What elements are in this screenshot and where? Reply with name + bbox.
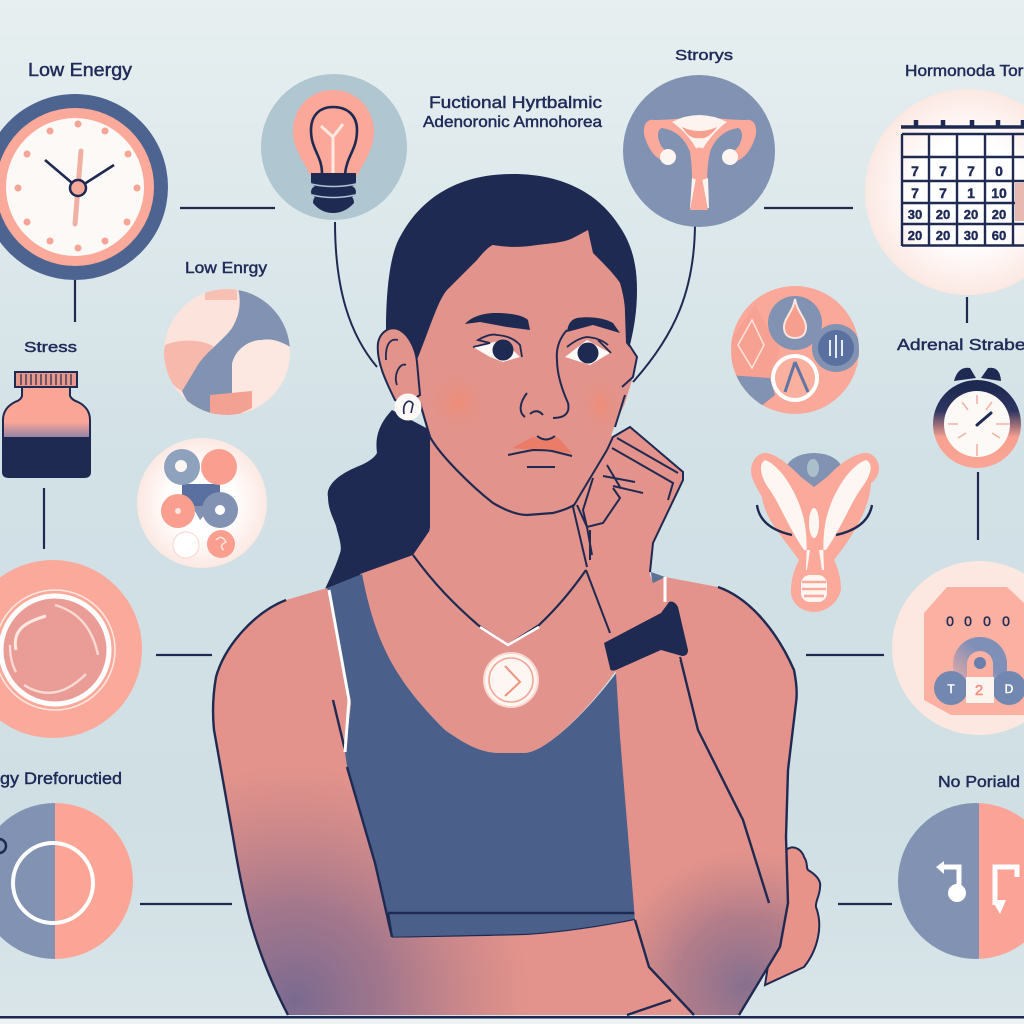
- icon: padlock calendar circle: 0: [946, 613, 954, 629]
- face: [397, 230, 637, 515]
- white strap piping: [329, 577, 665, 752]
- icon: padlock calendar circle: 2: [975, 682, 983, 699]
- subtitle: Adenoronic Amnohorea: [423, 114, 602, 131]
- ponytail: [325, 410, 430, 589]
- neck and chest skin: [360, 430, 650, 753]
- bottom strip: [0, 1019, 1024, 1024]
- label: energy deficiency: gy Drefoructied: [0, 769, 122, 788]
- icon: calendar: 7: [939, 185, 947, 201]
- eyes: [473, 335, 611, 365]
- icon: alarm clock: [933, 368, 1021, 468]
- icon: wall clock: [0, 94, 168, 280]
- icon: calendar: 20: [936, 207, 950, 222]
- right arm: [610, 577, 797, 1015]
- wrist skin: [587, 540, 680, 673]
- icon: split circle with arrows: [898, 803, 1024, 959]
- label: low energy top left: Low Energy: [28, 60, 132, 80]
- label: stress left: Stress: [24, 339, 77, 356]
- icon: padlock calendar circle: 0: [1002, 613, 1010, 629]
- tank top: [327, 574, 635, 938]
- hair: [386, 174, 637, 372]
- connector lines: [44, 208, 978, 904]
- nose: [521, 330, 568, 418]
- icon: reproductive organ: [751, 453, 879, 612]
- icon: calendar: 7: [911, 163, 919, 179]
- icon: padlock calendar circle: D: [1005, 682, 1014, 696]
- fist: [573, 427, 683, 572]
- label: adrenal: Adrenal Straber: [897, 337, 1024, 354]
- title: Fuctional Hyrtbalmic: [429, 93, 603, 112]
- left arm: [213, 588, 700, 1015]
- icon: padlock calendar circle: T: [947, 682, 955, 696]
- icon: calendar: 7: [911, 185, 919, 201]
- icon: calendar: 60: [992, 228, 1006, 243]
- right ear: [615, 343, 637, 427]
- cheeks: [428, 372, 488, 432]
- icon: padlock calendar circle: 0: [964, 613, 972, 629]
- icon: light bulb: [261, 74, 407, 220]
- icon: calendar: [865, 89, 1024, 295]
- icon: hormone molecules circle: [137, 438, 267, 568]
- tank top band: [388, 913, 635, 938]
- figure outlines: [213, 587, 797, 1015]
- left arm shading: [213, 588, 700, 1015]
- label: hormonal top right: Hormonoda Torn: [905, 63, 1024, 80]
- icon: padlock calendar circle: [892, 561, 1024, 735]
- hand behind elbow: [765, 847, 820, 985]
- jaw line: [420, 403, 580, 515]
- base line: [0, 1016, 1024, 1018]
- icon: uterus: [623, 75, 775, 227]
- right arm shading: [610, 577, 797, 1015]
- icon: split circle with ring: [0, 803, 133, 959]
- label: low energy middle: Low Enrgy: [185, 260, 267, 277]
- icon: calendar: 1: [967, 185, 975, 201]
- icon: padlock calendar circle: 0: [983, 613, 991, 629]
- icon: calendar: 0: [995, 163, 1003, 179]
- fist outline: [573, 427, 683, 572]
- label: stress top: Strorys: [675, 47, 733, 64]
- icon: calendar: 20: [992, 207, 1006, 222]
- earring: [394, 394, 422, 420]
- icon: calendar: 20: [964, 207, 978, 222]
- icon: calendar: 30: [908, 207, 922, 222]
- icon: abstract tissue circle: [164, 289, 290, 415]
- left ear: [378, 328, 420, 405]
- icon: calendar: 10: [991, 185, 1007, 201]
- right strap: [651, 572, 665, 606]
- icon: calendar: 7: [967, 163, 975, 179]
- wristband: [604, 602, 688, 671]
- icon: calendar: 30: [964, 228, 978, 243]
- central figure: [213, 174, 820, 1015]
- icon: calendar: 7: [939, 163, 947, 179]
- icon: calendar: 20: [936, 228, 950, 243]
- necklace and pendant: [413, 555, 586, 707]
- icon: bottle: [3, 372, 90, 477]
- eyebrows: [465, 313, 530, 330]
- label: no period: No Poriald: [938, 774, 1020, 791]
- icon: calendar: 20: [908, 228, 922, 243]
- mouth: [512, 437, 572, 453]
- icon: large stress ring circle: [0, 560, 142, 738]
- icon: hormone cluster circle: [730, 285, 860, 415]
